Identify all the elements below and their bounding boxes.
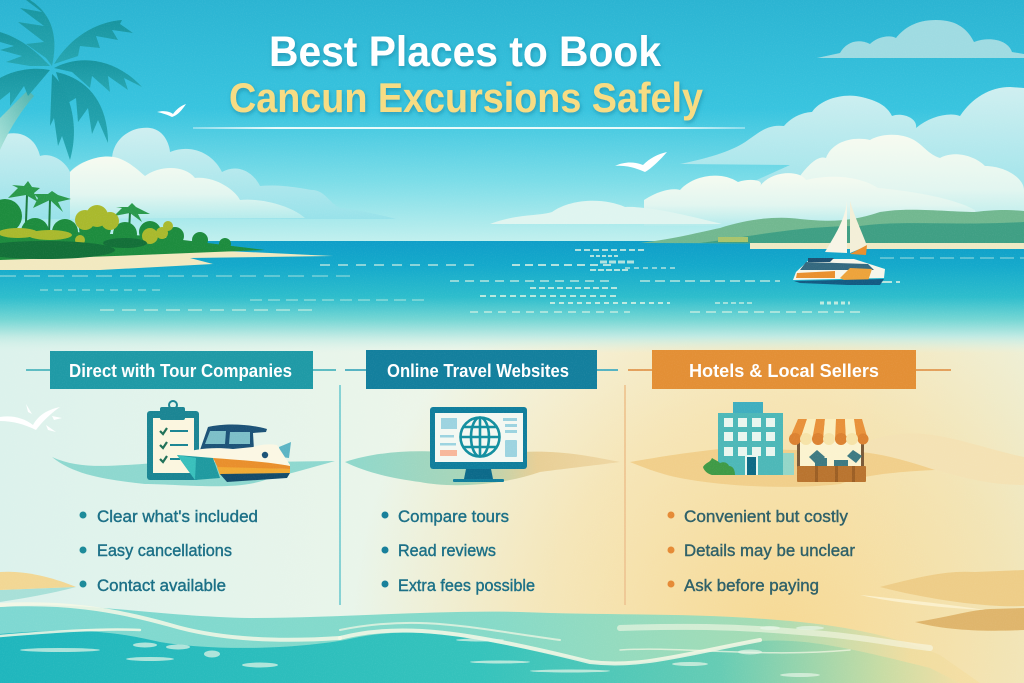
title: Cancun Excursions Safely [229, 74, 704, 121]
bullets: column three: Ask before paying [684, 576, 819, 595]
header: hotels and local sellers [628, 350, 951, 389]
cloud: low horizon [490, 201, 722, 224]
column divider two [624, 385, 626, 605]
background: lower pale sand area [0, 320, 1024, 683]
title [229, 28, 704, 121]
bird: upper right [615, 152, 667, 172]
sand bank: bottom left [0, 572, 76, 602]
bird: upper left [157, 104, 186, 117]
bullets: column two: Extra fees possible [398, 576, 535, 595]
bullets: column one: Contact available [97, 576, 226, 595]
swoosh under icon two [345, 451, 620, 485]
background: sky [0, 0, 1024, 242]
cloud: right bank, back [680, 87, 1024, 210]
icon: computer monitor with globe [430, 407, 527, 482]
icon: market stall [789, 419, 868, 482]
bullets: column two: Compare tours [398, 507, 509, 526]
header: online travel websites: Online Travel Websites [387, 361, 569, 381]
column divider one [339, 385, 341, 605]
sea sparkle [0, 250, 1024, 312]
bullets: column two: Read reviews [398, 541, 496, 560]
bullets: column one: Clear what's included [97, 507, 258, 526]
cloud: right bank, front [644, 135, 1024, 226]
water: bottom front band [0, 631, 960, 683]
sailboat [793, 201, 885, 285]
icon: speedboat [177, 425, 291, 482]
bullets: column three: Details may be unclear [684, 541, 855, 560]
bullets: column three [668, 507, 855, 595]
bullets: column three: Convenient but costly [684, 507, 848, 526]
bullets: column two [382, 507, 535, 595]
left palm tree [0, 0, 142, 160]
water: bottom back band [0, 605, 980, 683]
left island [0, 181, 333, 270]
background: sea [0, 241, 1024, 353]
dunes: bottom right [860, 570, 1024, 631]
header: direct with tour companies [26, 351, 336, 389]
swoosh and dune under icon three [630, 433, 1024, 487]
foam flecks [20, 626, 824, 677]
icon: hotel building [703, 402, 794, 475]
header: hotels and local sellers: Hotels & Local Sellers [689, 361, 879, 381]
title: Best Places to Book [269, 28, 661, 76]
title rule [193, 127, 745, 129]
icon: clipboard [147, 401, 199, 480]
header: direct with tour companies: Direct with Tour Companies [69, 361, 292, 381]
header: online travel websites [345, 350, 618, 389]
bullets: column one [80, 507, 258, 595]
bullets: column one: Easy cancellations [97, 541, 232, 560]
cloud: top right [817, 20, 1024, 58]
foam lines [0, 604, 930, 663]
swoosh under icon one [52, 457, 335, 486]
seagull: left edge [0, 404, 62, 432]
right island [640, 210, 1024, 249]
cloud: left bank [0, 128, 396, 219]
